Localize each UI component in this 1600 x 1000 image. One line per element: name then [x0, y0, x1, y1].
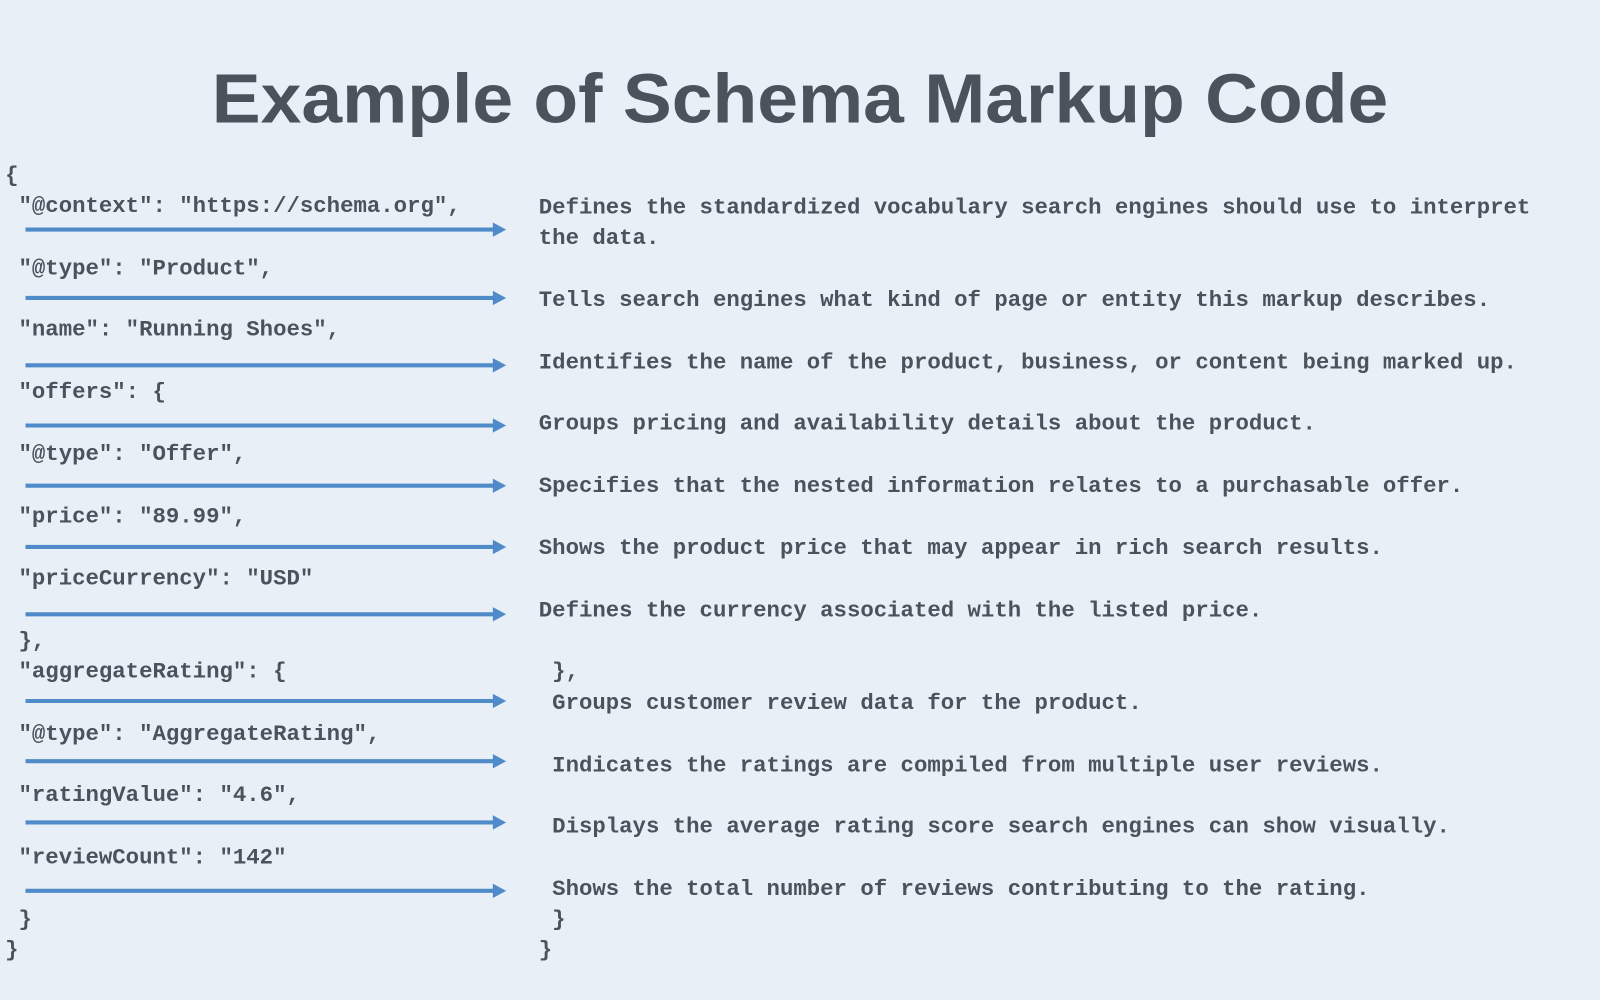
- descriptions: },: [539, 659, 579, 685]
- descriptions: Shows the total number of reviews contributing to the rating.: [539, 876, 1370, 902]
- code block: JSON-LD: "offers": {: [5, 379, 166, 405]
- code block: JSON-LD: "@type": "Product",: [5, 255, 273, 281]
- descriptions: Defines the currency associated with the listed price.: [539, 597, 1262, 623]
- title: Example of Schema Markup Code: [212, 59, 1388, 137]
- descriptions: Indicates the ratings are compiled from multiple user reviews.: [539, 752, 1383, 778]
- code block: JSON-LD: {: [5, 163, 19, 189]
- descriptions: Identifies the name of the product, business, or content being marked up.: [539, 349, 1517, 375]
- code block: JSON-LD: }: [5, 937, 19, 963]
- code block: JSON-LD: "price": "89.99",: [5, 503, 246, 529]
- descriptions: }: [539, 937, 552, 963]
- code block: JSON-LD: "@context": "https://schema.org",: [5, 193, 461, 219]
- descriptions: Displays the average rating score search engines can show visually.: [539, 814, 1450, 840]
- code block: JSON-LD: "aggregateRating": {: [5, 659, 286, 685]
- arrows: [26, 222, 506, 898]
- code block: JSON-LD: [5, 163, 461, 963]
- descriptions: Tells search engines what kind of page or entity this markup describes.: [539, 287, 1490, 313]
- descriptions: Groups customer review data for the product.: [539, 690, 1142, 716]
- descriptions: Defines the standardized vocabulary search engines should use to interpret: [539, 194, 1530, 220]
- descriptions: Shows the product price that may appear in rich search results.: [539, 535, 1383, 561]
- code block: JSON-LD: "@type": "AggregateRating",: [5, 721, 380, 747]
- descriptions: the data.: [539, 225, 659, 251]
- descriptions: }: [539, 907, 566, 933]
- descriptions: [539, 194, 1530, 963]
- code block: JSON-LD: "reviewCount": "142": [5, 844, 286, 870]
- code block: JSON-LD: "name": "Running Shoes",: [5, 317, 340, 343]
- descriptions: Specifies that the nested information relates to a purchasable offer.: [539, 473, 1463, 499]
- code block: JSON-LD: "priceCurrency": "USD": [5, 566, 313, 592]
- descriptions: Groups pricing and availability details about the product.: [539, 411, 1316, 437]
- code block: JSON-LD: },: [5, 628, 45, 654]
- code block: JSON-LD: "ratingValue": "4.6",: [5, 782, 300, 808]
- code block: JSON-LD: "@type": "Offer",: [5, 441, 246, 467]
- code block: JSON-LD: }: [5, 907, 32, 933]
